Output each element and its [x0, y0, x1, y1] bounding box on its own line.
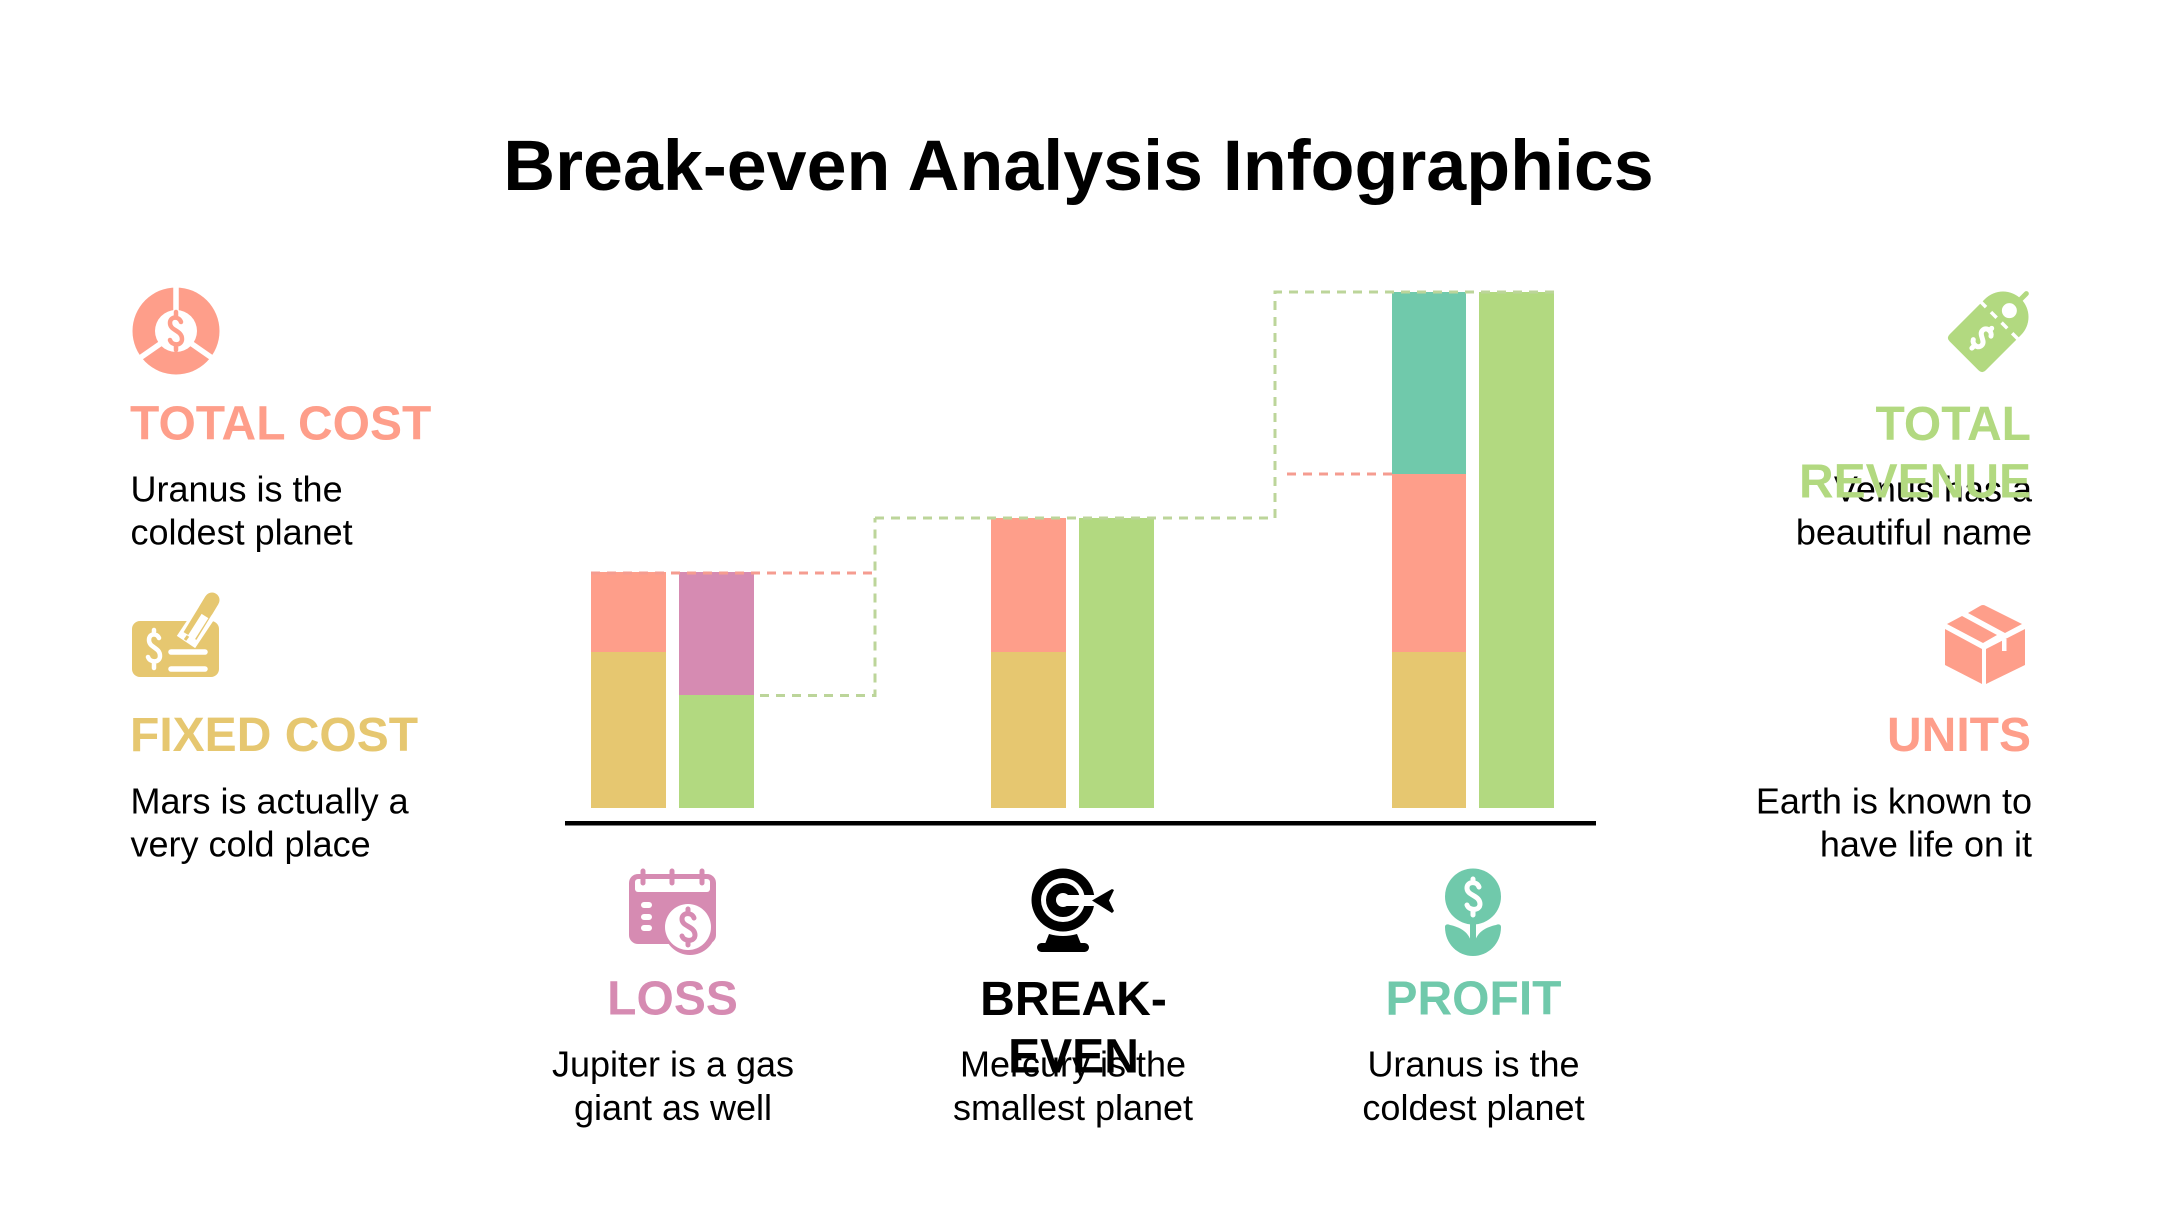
- heading: UNITS: [1887, 709, 2031, 762]
- description: beautiful name: [1796, 512, 2032, 553]
- panel: fixed cost: [130, 600, 418, 865]
- dashed connector: revenue steps: [760, 292, 1558, 696]
- axis baseline: [565, 821, 1596, 826]
- heading: REVENUE: [1799, 456, 2031, 508]
- icon: cheque and pen: [132, 600, 219, 677]
- panel: units: [1756, 605, 2032, 865]
- heading: TOTAL COST: [130, 398, 431, 450]
- icon: price tag with dollar: [1945, 275, 2045, 375]
- group 2 bars: break-even: [991, 518, 1154, 808]
- heading: EVEN: [1008, 1030, 1139, 1084]
- panel: total revenue: [1796, 275, 2045, 553]
- description: coldest planet: [1362, 1087, 1585, 1128]
- title: Break-even Analysis Infographics: [503, 126, 1654, 206]
- icon: pie chart with dollar: [132, 285, 220, 374]
- icon: calendar with dollar coin: [629, 871, 716, 955]
- group 3 bars: profit: [1392, 292, 1554, 808]
- panel: total cost: [130, 285, 431, 553]
- heading: LOSS: [607, 972, 738, 1025]
- bar chart: [565, 292, 1596, 826]
- panel: loss: [552, 871, 794, 1128]
- description: Uranus is the: [130, 468, 343, 509]
- icon: cardboard box: [1945, 605, 2025, 684]
- panel: profit: [1362, 868, 1585, 1128]
- panel: break-even: [953, 868, 1193, 1128]
- description: smallest planet: [953, 1087, 1193, 1128]
- description: Mercury is the: [960, 1044, 1186, 1084]
- description: Mars is actually a: [130, 780, 409, 821]
- heading: FIXED COST: [130, 709, 418, 762]
- group 1 bars: loss: [591, 572, 754, 808]
- heading: PROFIT: [1386, 972, 1562, 1025]
- description: giant as well: [574, 1087, 772, 1128]
- heading: BREAK-: [980, 973, 1167, 1026]
- description: coldest planet: [130, 512, 353, 553]
- icon: target with dart: [1032, 868, 1114, 952]
- description: Earth is known to: [1756, 780, 2032, 821]
- heading: TOTAL: [1875, 398, 2031, 451]
- dashed connector: total cost levels: [591, 474, 1392, 573]
- description: have life on it: [1820, 824, 2032, 865]
- description: very cold place: [130, 824, 371, 865]
- description: Uranus is the: [1367, 1044, 1580, 1084]
- description: Venus has a: [1834, 468, 2032, 509]
- icon: money plant: [1445, 868, 1501, 956]
- description: Jupiter is a gas: [552, 1044, 794, 1084]
